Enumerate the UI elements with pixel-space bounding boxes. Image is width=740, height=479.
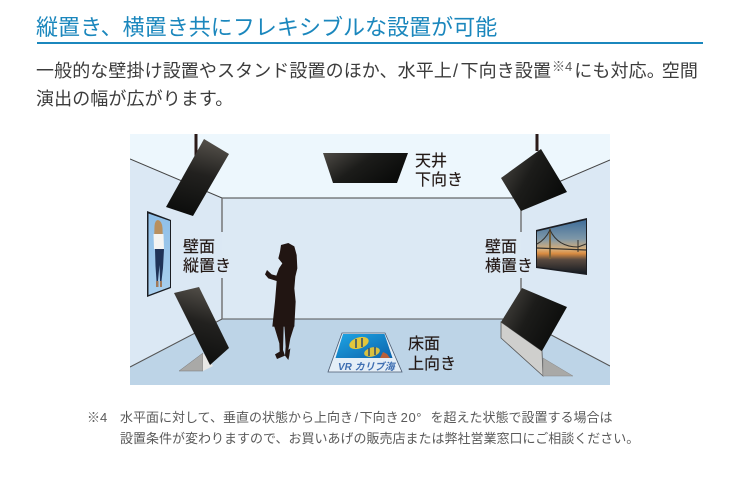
label: ceiling facing down — [415, 152, 463, 189]
ceiling — [130, 134, 610, 204]
label: floor facing up — [408, 335, 456, 373]
floor — [130, 319, 610, 385]
person silhouette — [265, 243, 297, 360]
floor display with VR image: VR カリブ海 — [338, 361, 397, 373]
footnote: ※4 — [87, 410, 107, 425]
label: wall portrait: 壁面 — [183, 238, 215, 256]
floor display with VR image — [328, 333, 402, 373]
floor stand display right — [501, 288, 573, 376]
side walls — [130, 159, 610, 367]
body text: 演出の幅が広がります。 — [36, 89, 233, 109]
wall landscape display — [536, 218, 587, 275]
ceiling pole right — [536, 134, 538, 151]
ceiling pole left — [194, 134, 198, 156]
room illustration — [130, 134, 610, 385]
label: wall landscape: 横置き — [485, 257, 533, 275]
label: wall landscape: 壁面 — [485, 238, 517, 256]
footnote — [87, 410, 639, 446]
bridge in signage — [537, 229, 586, 259]
body text — [36, 59, 698, 109]
label: ceiling facing down: 天井 — [415, 152, 447, 170]
footnote: 設置条件が変わりますので、お買いあげの販売店または弊社営業窓口にご相談ください。 — [120, 431, 639, 446]
label: floor facing up: 上向き — [408, 355, 456, 373]
back wall — [222, 198, 521, 319]
tilted display from ceiling right — [501, 149, 567, 211]
body text: 一般的な壁掛け設置やスタンド設置のほか、水平上/下向き設置※4にも対応。空間 — [36, 59, 698, 81]
wall portrait display — [147, 211, 171, 297]
title underline — [37, 42, 703, 44]
ceiling display facing down — [323, 153, 408, 183]
woman in signage — [154, 220, 164, 287]
tilted display from ceiling left — [166, 139, 229, 216]
room edge lines — [130, 159, 610, 367]
label: ceiling facing down: 下向き — [415, 171, 463, 189]
label: floor facing up: 床面 — [408, 335, 440, 353]
label: wall portrait — [183, 238, 231, 275]
label: wall portrait: 縦置き — [183, 257, 231, 275]
label: wall landscape — [485, 238, 533, 275]
title: 縦置き、横置き共にフレキシブルな設置が可能 — [36, 15, 497, 40]
floor stand display left — [174, 287, 229, 371]
footnote: 水平面に対して、垂直の状態から上向き/下向き20° を超えた状態で設置する場合は — [120, 410, 612, 425]
